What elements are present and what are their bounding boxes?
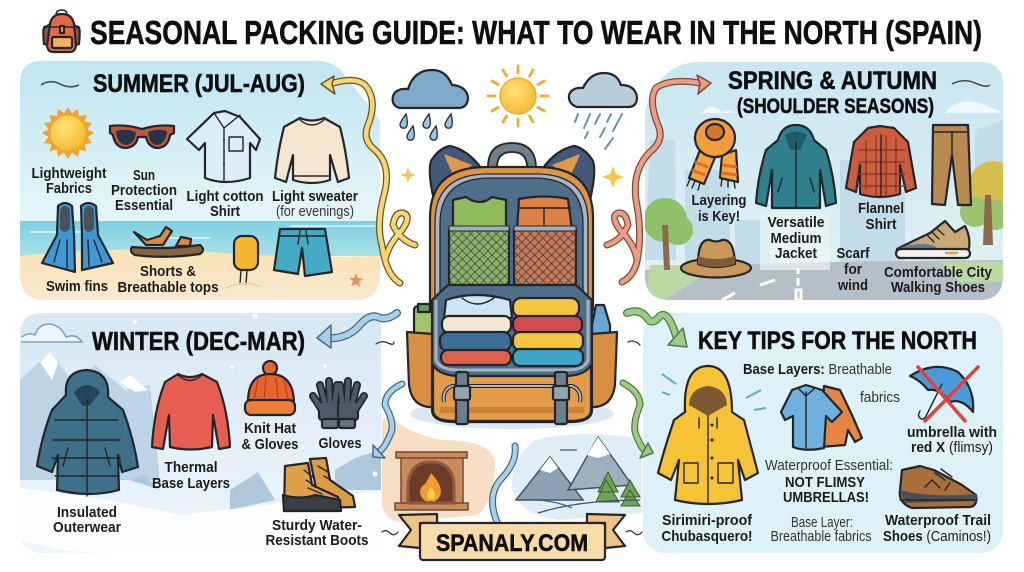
labels: key tips: Sirimiri-proof — [662, 512, 753, 529]
panel: winter — [20, 313, 381, 553]
heading: key tips: KEY TIPS FOR THE NORTH — [698, 327, 977, 355]
arrow: to mountains — [623, 383, 653, 458]
labels: winter: Knit Hat — [244, 420, 296, 437]
icon: popsicle — [226, 236, 260, 288]
icon: sunglasses — [110, 125, 174, 148]
icon: sturdy boots — [283, 458, 355, 511]
labels: spring and autumn: Shirt — [866, 216, 897, 233]
labels: summer: Fabrics — [46, 180, 92, 197]
labels: key tips: Chubasquero! — [662, 528, 752, 545]
labels: spring and autumn: is Key! — [698, 208, 740, 225]
icon: sandal — [131, 227, 203, 257]
labels: key tips — [662, 362, 997, 545]
heading: spring and autumn: SPRING & AUTUMN — [728, 67, 937, 95]
labels: key tips: Waterproof Essential: — [765, 458, 893, 474]
labels: key tips: umbrella with — [907, 424, 997, 441]
panel: key tips — [643, 313, 1003, 553]
icon: medium jacket — [756, 125, 836, 208]
icon: cloud outline — [21, 324, 82, 342]
backpack main body — [430, 167, 593, 310]
icon: swim fins — [42, 203, 113, 272]
winter background scene — [20, 313, 381, 553]
labels: winter — [53, 420, 368, 549]
icon: scarf — [687, 119, 738, 190]
labels: key tips: Base Layers: Breathable — [743, 362, 892, 378]
labels: key tips: red X (flimsy) — [911, 440, 993, 456]
labels: summer: Swim fins — [46, 278, 108, 295]
labels: key tips: Shoes (Caminos!) — [883, 529, 991, 545]
arrow: to summer — [321, 76, 415, 283]
icon: knit hat — [245, 361, 295, 415]
heading: spring and autumn: (SHOULDER SEASONS) — [737, 95, 934, 118]
labels: summer: Shorts & — [140, 263, 196, 280]
arrow: to spring — [607, 75, 711, 282]
arrow: to key tips — [627, 311, 687, 347]
labels: winter: Resistant Boots — [266, 532, 368, 549]
icon: sparkles — [400, 166, 624, 188]
labels: winter: Insulated — [57, 504, 117, 521]
backpack — [407, 143, 617, 429]
labels: key tips: NOT FLIMSY — [785, 474, 865, 491]
labels: winter: Thermal — [164, 459, 218, 476]
icon: rain cloud right — [569, 73, 637, 149]
labels: spring and autumn: Medium — [770, 230, 822, 247]
squiggle accents — [376, 341, 642, 535]
backpack buckles and strap fronts — [444, 372, 580, 424]
labels: summer: Essential — [115, 197, 173, 214]
heading: summer: SUMMER (JUL-AUG) — [93, 70, 305, 98]
icon: sweater — [275, 118, 349, 183]
summer background scene — [20, 61, 380, 300]
labels: summer: Shirt — [210, 203, 240, 220]
labels: key tips: Waterproof Trail — [885, 512, 991, 529]
labels: summer: (for evenings) — [276, 204, 354, 220]
icon: hat — [681, 240, 751, 278]
icon: red backpack — [43, 10, 80, 52]
labels: summer: Lightweight — [32, 165, 106, 182]
labels: key tips: fabrics — [860, 390, 900, 406]
labels: spring and autumn: wind — [837, 277, 868, 294]
labels: summer: Protection — [111, 182, 177, 199]
backpack shadow — [410, 399, 614, 429]
labels: spring and autumn: Comfortable City — [884, 264, 993, 281]
banner: spanaly.com: SPANALY.COM — [436, 530, 588, 557]
labels: spring and autumn: Versatile — [768, 214, 824, 231]
heading: spring and autumn — [728, 67, 990, 118]
icon: layered shirts — [781, 385, 862, 450]
icon: starfish — [349, 273, 363, 287]
labels: winter: Sturdy Water- — [272, 517, 362, 534]
icon: yellow raincoat — [658, 366, 766, 504]
icon: light shirt — [187, 111, 260, 182]
backpack side pockets and bottles — [407, 304, 617, 407]
labels: spring and autumn: Scarf — [836, 245, 870, 262]
tips background — [643, 313, 1003, 553]
arrow: to banner — [493, 446, 515, 522]
labels: key tips: UMBRELLAS! — [783, 489, 869, 506]
arrow: to fireplace — [373, 384, 402, 458]
labels: winter: & Gloves — [242, 436, 298, 453]
labels: spring and autumn: Walking Shoes — [891, 279, 985, 296]
icon: sun — [42, 107, 94, 159]
panel: summer — [20, 61, 380, 300]
labels: summer: Breathable tops — [118, 279, 218, 296]
icon: thermal long sleeve — [152, 374, 230, 450]
labels: summer: Light cotton — [186, 188, 264, 205]
backpack lower compartment — [432, 285, 592, 422]
labels: summer — [32, 165, 358, 296]
backpack upper packed clothes — [449, 196, 576, 285]
icon: sun center — [488, 66, 548, 126]
labels: winter: Base Layers — [152, 475, 230, 492]
labels: summer: Sun — [133, 167, 155, 184]
labels: summer: Light sweater — [272, 188, 358, 205]
icon: flannel shirt — [846, 126, 916, 197]
labels: spring and autumn: for — [844, 261, 862, 278]
icon: gloves — [313, 381, 364, 428]
banner: spanaly.com — [399, 514, 625, 560]
backpack straps and handle — [430, 143, 594, 205]
icon: pants — [932, 125, 971, 205]
icon: walking shoe — [896, 221, 970, 258]
icon: trail shoe — [900, 466, 977, 508]
spring background scene — [643, 62, 1017, 300]
panel: spring and autumn — [643, 62, 1017, 300]
icon: crossed umbrella — [910, 367, 978, 421]
labels: key tips: Breathable fabrics — [770, 529, 872, 545]
labels: spring and autumn: Jacket — [775, 245, 817, 262]
icon: shorts — [274, 229, 332, 276]
icon: insulated parka — [37, 370, 138, 496]
labels: winter: Gloves — [318, 435, 362, 452]
icon: rain cloud left — [393, 70, 468, 140]
heading: winter: WINTER (DEC-MAR) — [92, 326, 305, 356]
arrow: to winter — [317, 313, 397, 348]
labels: spring and autumn: Flannel — [858, 200, 904, 217]
labels: key tips: Base Layer: — [791, 515, 853, 531]
labels: spring and autumn: Layering — [692, 192, 746, 209]
scene: mountains — [512, 434, 642, 520]
labels: winter: Outerwear — [53, 519, 121, 536]
scene: fireplace — [382, 415, 495, 522]
labels: spring and autumn — [692, 192, 993, 296]
